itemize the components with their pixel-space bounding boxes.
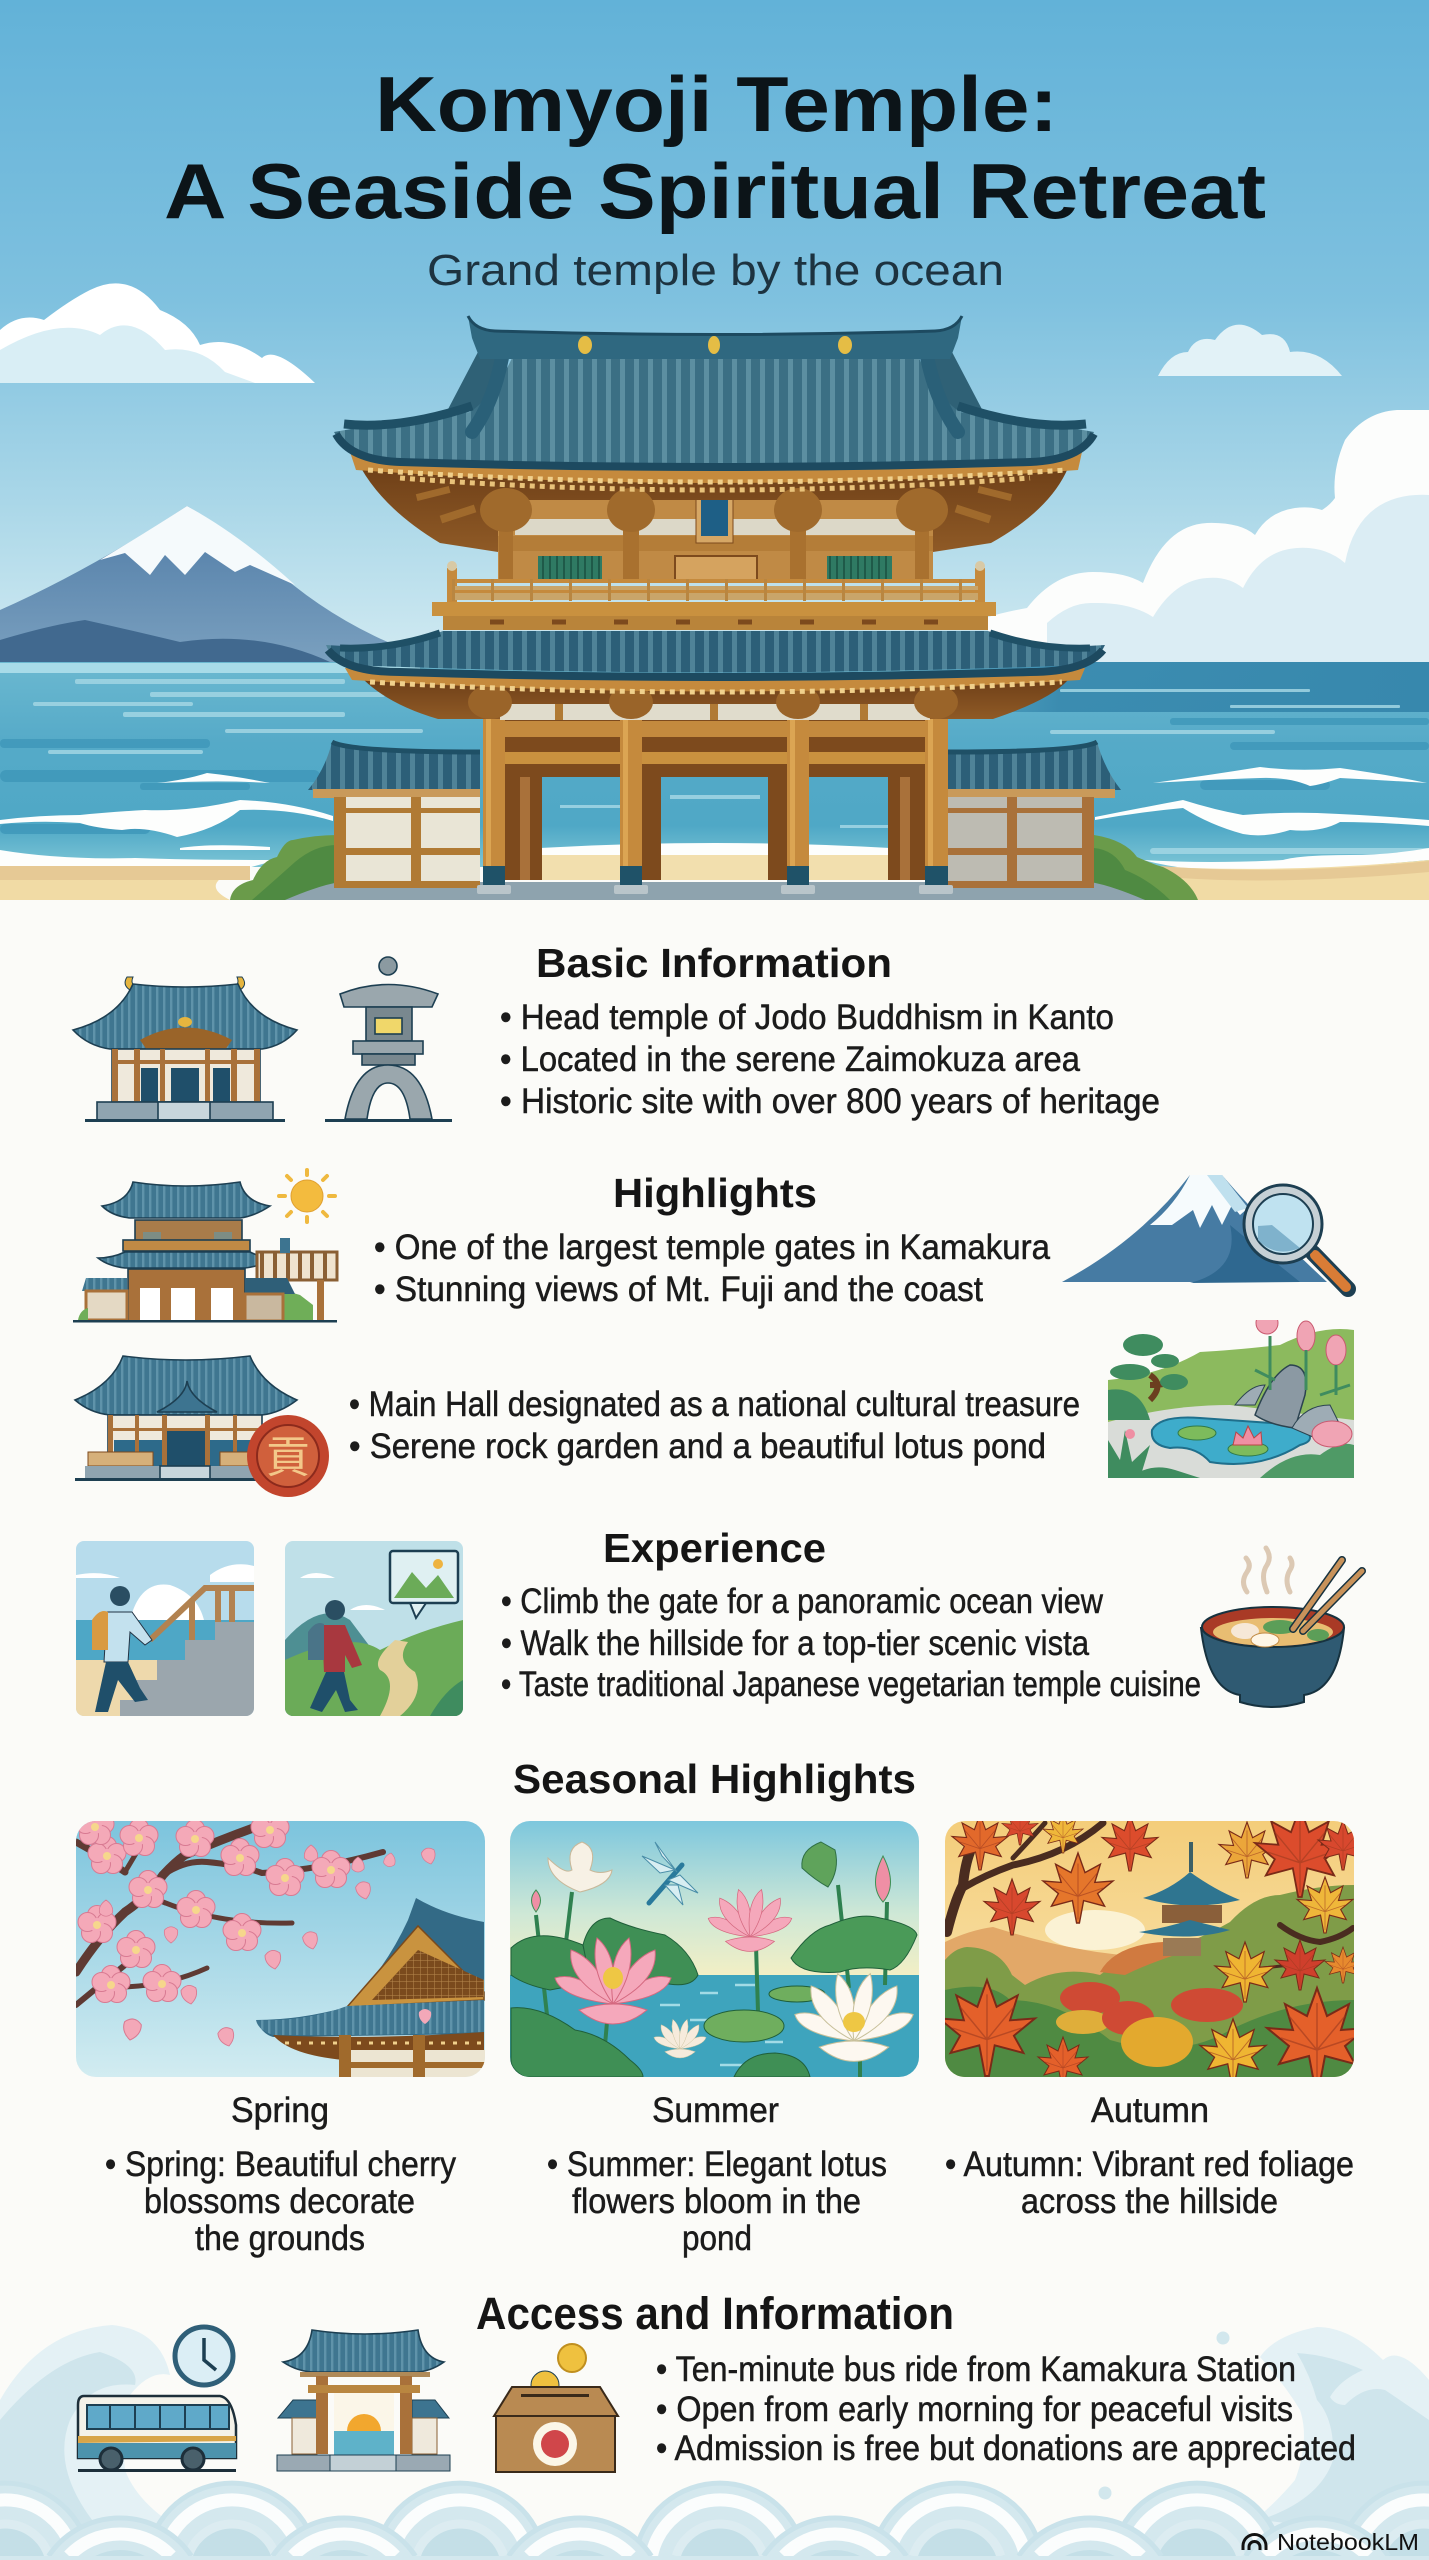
illustration: summer lotus pond [510, 1821, 919, 2077]
illustration: spring cherry blossoms [76, 1808, 485, 2077]
bullet list: experience: • Taste traditional Japanese vegetarian temple cuisine [501, 1665, 1201, 1704]
subtitle: Grand temple by the ocean [427, 246, 1004, 295]
title: Komyoji Temple: [375, 60, 1058, 148]
bullet list: basic information: • Historic site with over 800 years of heritage [500, 1082, 1160, 1121]
text block: autumn: • Autumn: Vibrant red foliage [945, 2145, 1354, 2184]
sky [0, 0, 1429, 670]
sea [0, 662, 1429, 867]
panel: basic information [73, 940, 1160, 1122]
lower roof [326, 631, 1105, 677]
bullet list: national treasure: • Main Hall designated as a national cultural treasure [349, 1385, 1080, 1424]
text block: spring [105, 2145, 456, 2258]
icon: rock garden [1108, 1312, 1354, 1478]
upper roof back layer [445, 352, 985, 415]
illustration: autumn foliage [945, 1821, 1354, 2077]
bullet list: experience [501, 1582, 1201, 1704]
label: spring: Spring [231, 2091, 329, 2130]
text block: spring: • Spring: Beautiful cherry [105, 2145, 456, 2184]
lower eave underside [364, 680, 1068, 720]
upper bracket band [350, 452, 1082, 483]
side wing right [948, 742, 1121, 888]
icon: gate with sun [73, 1170, 337, 1322]
icon: ramen bowl [1201, 1548, 1362, 1707]
panel: access and information [0, 2288, 1429, 2560]
ground floor interior walls [504, 764, 925, 880]
bullet list: access: • Ten-minute bus ride from Kamakura Station [656, 2350, 1296, 2389]
text block: autumn [945, 2145, 1354, 2221]
side wing left [308, 742, 480, 888]
background waves [0, 2325, 1429, 2560]
bullet list: basic information: • Head temple of Jodo Buddhism in Kanto [500, 998, 1114, 1037]
main temple gate [308, 316, 1121, 894]
icon: temple hall [73, 977, 297, 1122]
bullet list: access [656, 2350, 1356, 2468]
heading: experience: Experience [603, 1525, 826, 1571]
panel: highlights [73, 1170, 1354, 1497]
green bushes [230, 835, 1198, 900]
beach [0, 855, 1429, 900]
icon: Mt Fuji with magnifier [1062, 1175, 1348, 1289]
text block: summer: pond [682, 2219, 752, 2258]
text block: summer: flowers bloom in the [572, 2182, 861, 2221]
text block: autumn: across the hillside [1021, 2182, 1278, 2221]
icon: donation box with coins [494, 2344, 618, 2472]
illustration: hillside walk [285, 1541, 463, 1716]
lower bracket band [345, 668, 1085, 692]
large right cloud [988, 410, 1429, 662]
watermark: NotebookLM: NotebookLM [1277, 2529, 1419, 2555]
label: summer: Summer [652, 2091, 779, 2130]
left cloud [0, 283, 315, 383]
panel: experience [76, 1525, 1362, 1716]
balcony [432, 561, 996, 630]
title: A Seaside Spiritual Retreat [164, 147, 1266, 235]
text block: spring: the grounds [195, 2219, 365, 2258]
bullet list: highlights [374, 1228, 1050, 1309]
heading: seasonal highlights: Seasonal Highlights [513, 1756, 916, 1802]
heading: basic information: Basic Information [536, 940, 892, 986]
stone path [285, 882, 1145, 900]
text block: summer [547, 2145, 887, 2258]
bullet list: highlights: • Stunning views of Mt. Fuji and the coast [374, 1270, 983, 1309]
upper roof [334, 352, 1094, 467]
upper eave underside [361, 468, 1068, 552]
heading: highlights: Highlights [613, 1170, 817, 1216]
title [164, 60, 1266, 235]
icon: main hall with seal [75, 1356, 329, 1497]
bullet list: basic information: • Located in the serene Zaimokuza area [500, 1040, 1080, 1079]
panel: seasonal highlights [76, 1756, 1368, 2258]
label: autumn: Autumn [1091, 2091, 1209, 2130]
icon: bus and clock [78, 2327, 236, 2472]
bullet list: access: • Admission is free but donations are appreciated [656, 2429, 1356, 2468]
text block: spring: blossoms decorate [144, 2182, 415, 2221]
icon: stone lantern [325, 957, 452, 1122]
Mt Fuji [0, 506, 440, 662]
bullet list: highlights: • One of the largest temple gates in Kamakura [374, 1228, 1050, 1267]
pillars [477, 716, 953, 894]
icon: main hall with seal: 貢 [266, 1433, 310, 1482]
text block: summer: • Summer: Elegant lotus [547, 2145, 887, 2184]
bullet list: experience: • Walk the hillside for a top-tier scenic vista [501, 1624, 1089, 1663]
illustration: climbing gate stairs [76, 1541, 254, 1716]
small right cloud [1158, 325, 1342, 376]
bullet list: experience: • Climb the gate for a panoramic ocean view [501, 1582, 1104, 1621]
bullet list: national treasure [349, 1385, 1080, 1466]
bullet list: basic information [500, 998, 1160, 1121]
ocean waves [0, 767, 1429, 872]
second storey walls [498, 487, 933, 580]
heading: access and information: Access and Information [476, 2288, 954, 2339]
upper bracket clusters [416, 486, 1012, 532]
lintel beams [483, 720, 948, 777]
hero scene: sky, sea and temple [0, 0, 1429, 900]
bullet list: access: • Open from early morning for peaceful visits [656, 2390, 1293, 2429]
roof ridge [468, 316, 962, 359]
icon: gate with sunrise [277, 2330, 450, 2471]
bullet list: national treasure: • Serene rock garden and a beautiful lotus pond [349, 1427, 1046, 1466]
